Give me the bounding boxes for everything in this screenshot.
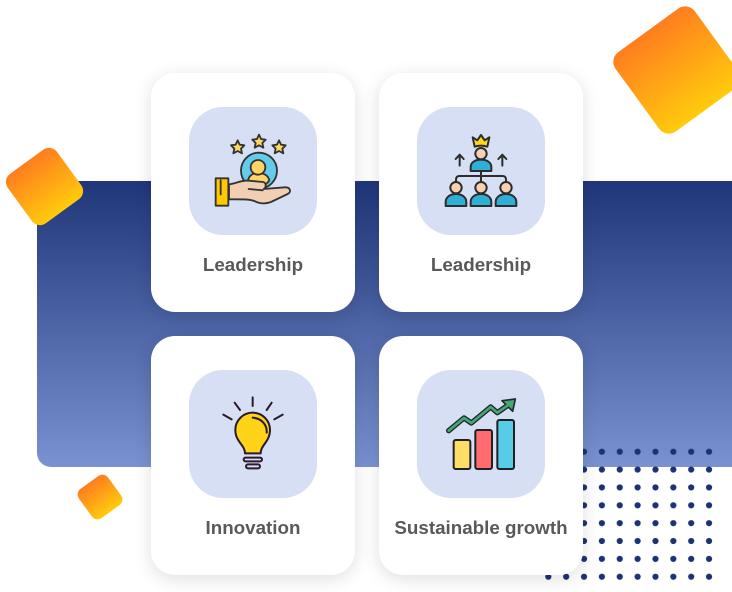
label: Innovation <box>206 517 300 538</box>
icon tile: hand holding person <box>189 107 317 235</box>
card: leadership, hand <box>151 73 355 312</box>
card: innovation <box>151 336 355 575</box>
label: Leadership <box>431 254 531 275</box>
decorative diamond: bottom left <box>74 471 125 522</box>
decorative diamond: left <box>2 144 87 229</box>
label: Sustainable growth <box>394 517 568 538</box>
decorative diamond: top right <box>609 1 732 138</box>
icon tile: growth chart <box>417 370 545 498</box>
icon tile: light bulb <box>189 370 317 498</box>
card: sustainable growth <box>379 336 583 575</box>
label: Leadership <box>203 254 303 275</box>
card: leadership, hierarchy <box>379 73 583 312</box>
icon tile: team hierarchy <box>417 107 545 235</box>
blue gradient backdrop panel <box>37 181 732 467</box>
